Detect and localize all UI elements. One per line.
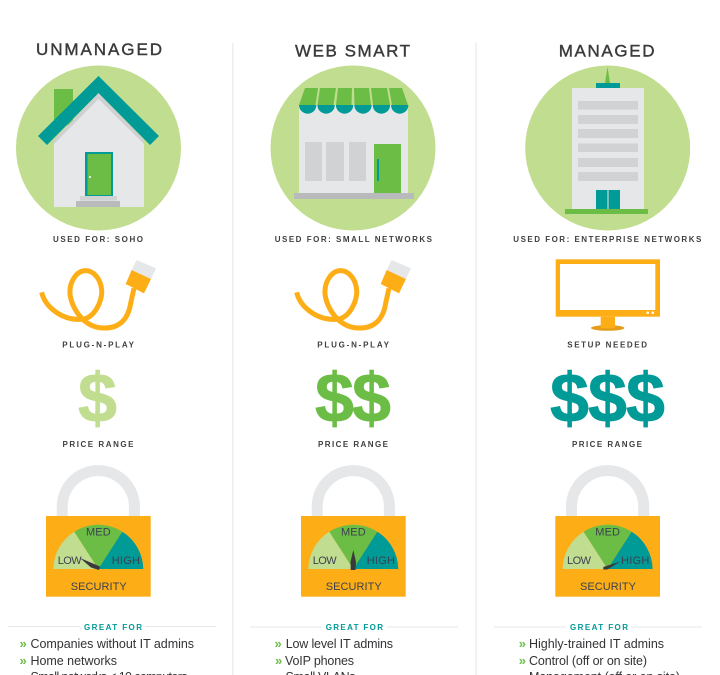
list: great for items: » [20,636,27,651]
icon: monitor [556,259,660,331]
list: great for items: » [20,653,27,668]
icon: security padlock high: MED [595,526,620,538]
list: great for items: » [275,653,282,668]
list: great for items: Home networks [30,654,117,668]
heading: great for: GREAT FOR [570,623,628,632]
icon: security padlock high: HIGH [621,555,649,567]
list: great for items [519,636,680,675]
icon: three dollar signs: $$$ [550,359,665,437]
list: great for items [274,636,393,675]
list: great for items: VoIP phones [285,654,354,668]
list: great for items: » [519,636,526,651]
icon: security padlock low: MED [86,526,111,538]
panel: web smart [250,42,458,675]
icon: security padlock medium [301,471,406,597]
label: used for enterprise networks: USED FOR: ENTERPRISE NETWORKS [513,235,702,244]
icon: office tower in circle [525,66,690,230]
icon: cable plug [297,260,411,328]
icon: storefront in circle [270,66,436,230]
heading: web smart: WEB SMART [295,42,410,61]
icon: security padlock low: HIGH [112,555,140,567]
list: great for items: Companies without IT admins [30,637,194,651]
list: great for items: Highly-trained IT admins [529,637,664,651]
icon: one dollar sign: $ [78,359,117,437]
heading: great for: GREAT FOR [326,623,383,632]
icon: security padlock medium: MED [341,526,366,538]
icon: security padlock high [555,471,660,597]
list: great for items: » [274,636,282,651]
heading: great for: GREAT FOR [84,623,142,632]
icon: cable plug [42,260,156,328]
label: used for soho: USED FOR: SOHO [53,235,143,244]
label: setup needed: SETUP NEEDED [567,341,647,350]
icon: security padlock low [46,471,151,597]
icon: security padlock high: SECURITY [580,581,637,593]
label: price range: PRICE RANGE [62,440,134,449]
icon: security padlock medium: LOW [313,555,337,567]
icon: two dollar signs: $$ [315,359,391,437]
heading: managed: MANAGED [559,42,654,61]
heading: unmanaged: UNMANAGED [36,40,162,59]
list: great for items: » [519,653,526,668]
icon: security padlock medium: SECURITY [326,581,382,593]
icon: security padlock low: SECURITY [71,581,127,593]
icon: house in circle [16,66,181,230]
icon: security padlock low: LOW [58,555,82,567]
icon: security padlock medium: HIGH [367,555,395,567]
panel: unmanaged [8,40,216,675]
icon: security padlock high: LOW [567,555,592,567]
label: used for small networks: USED FOR: SMALL NETWORKS [275,235,433,244]
label: price range: PRICE RANGE [572,440,643,449]
list: great for items: Control (off or on site) [529,654,647,668]
label: plug-n-play: PLUG-N-PLAY [317,341,390,350]
label: plug-n-play: PLUG-N-PLAY [62,341,135,350]
panel: managed [494,42,702,675]
list: great for items [20,636,194,675]
label: price range: PRICE RANGE [318,440,389,449]
list: great for items: Low level IT admins [286,637,393,651]
